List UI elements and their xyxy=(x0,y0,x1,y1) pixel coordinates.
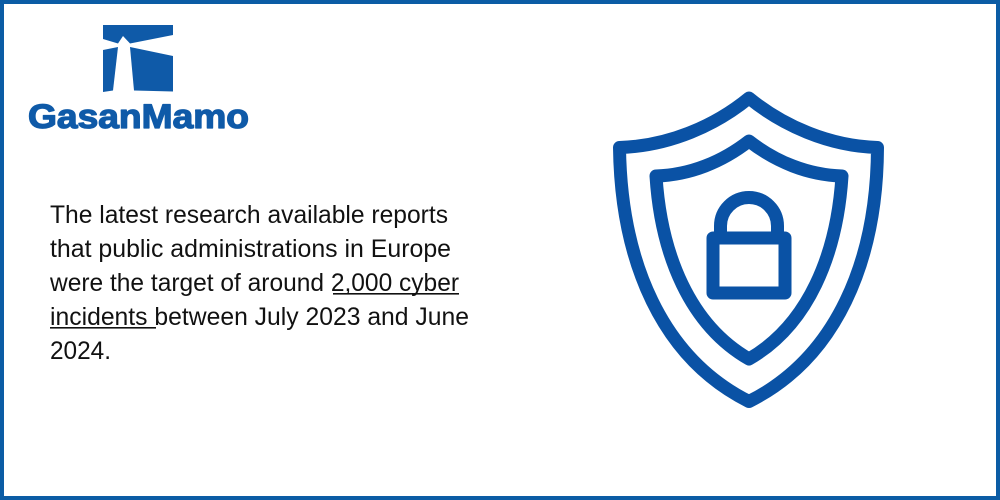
icon: shield with padlock xyxy=(620,98,878,402)
logo: GasanMamo xyxy=(28,25,249,136)
text block: cyber incidents statement xyxy=(49,201,469,365)
text block: cyber incidents statement: The latest research available reports xyxy=(50,201,448,229)
text block: cyber incidents statement: 2024. xyxy=(50,337,111,365)
icon: lighthouse xyxy=(103,25,173,92)
logo wordmark: GasanMamo xyxy=(28,98,249,136)
shield outer outline xyxy=(620,98,878,402)
padlock shackle xyxy=(720,198,778,238)
text block: cyber incidents statement: incidents between July 2023 and June xyxy=(50,303,469,331)
underline: 2,000 cyber xyxy=(333,293,459,295)
text block: cyber incidents statement: that public administrations in Europe xyxy=(50,235,451,263)
underline: incidents xyxy=(50,327,156,329)
text block: cyber incidents statement: were the target of around 2,000 cyber xyxy=(49,269,459,297)
padlock body xyxy=(713,238,785,293)
shield inner outline xyxy=(656,141,842,359)
